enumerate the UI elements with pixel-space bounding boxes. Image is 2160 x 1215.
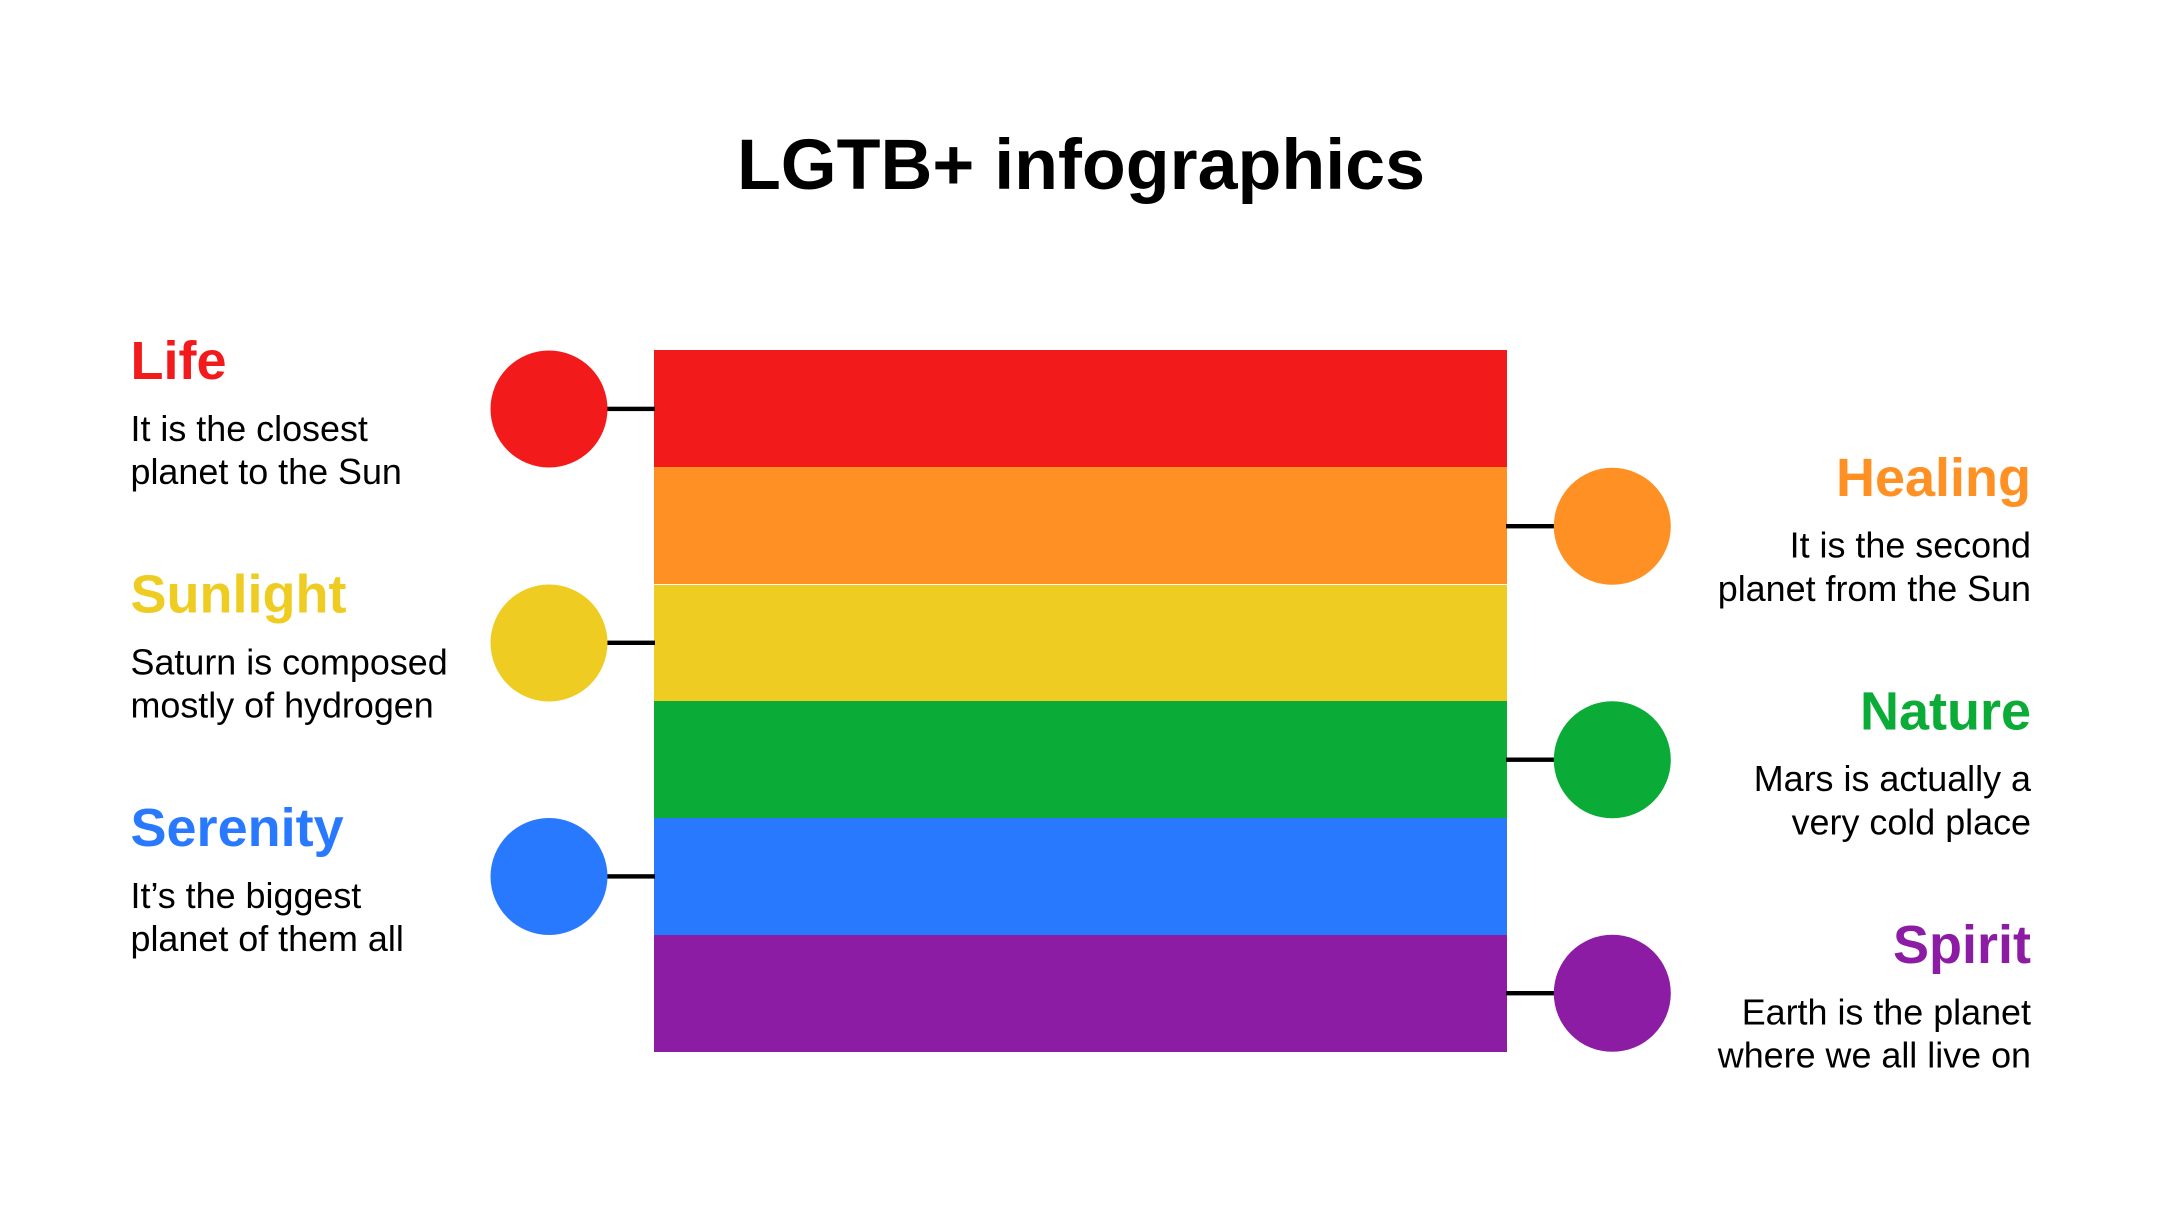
item: Spirit: where we all live on	[1717, 1036, 2031, 1076]
item: Healing: planet from the Sun	[1718, 569, 2031, 609]
item: Nature: very cold place	[1792, 802, 2031, 842]
rainbow flag	[654, 350, 1507, 1052]
item: Life: It is the closest	[130, 409, 368, 449]
item: Spirit: Spirit	[1893, 915, 2031, 975]
item: Healing: Healing	[1836, 448, 2031, 508]
item: Sunlight: mostly of hydrogen	[130, 686, 434, 726]
item: Serenity: It’s the biggest	[130, 876, 361, 916]
item: Spirit	[1506, 915, 2031, 1076]
item: Healing: It is the second	[1790, 526, 2031, 566]
item: Sunlight: Saturn is composed	[130, 642, 448, 682]
item: Serenity	[130, 798, 655, 959]
item: Healing	[1506, 448, 2031, 609]
item: Nature	[1506, 681, 2031, 842]
item: Nature: Mars is actually a	[1754, 759, 2031, 799]
item: Sunlight	[130, 565, 655, 726]
item: Serenity: planet of them all	[130, 919, 404, 959]
item: Nature: Nature	[1860, 681, 2031, 741]
item: Life: planet to the Sun	[130, 452, 402, 492]
item: Life: Life	[130, 331, 227, 391]
item: Sunlight: Sunlight	[130, 565, 346, 625]
item: Spirit: Earth is the planet	[1742, 993, 2031, 1033]
item: Serenity: Serenity	[130, 798, 344, 858]
title: LGTB+ infographics	[737, 125, 1425, 205]
item: Life	[130, 331, 655, 492]
